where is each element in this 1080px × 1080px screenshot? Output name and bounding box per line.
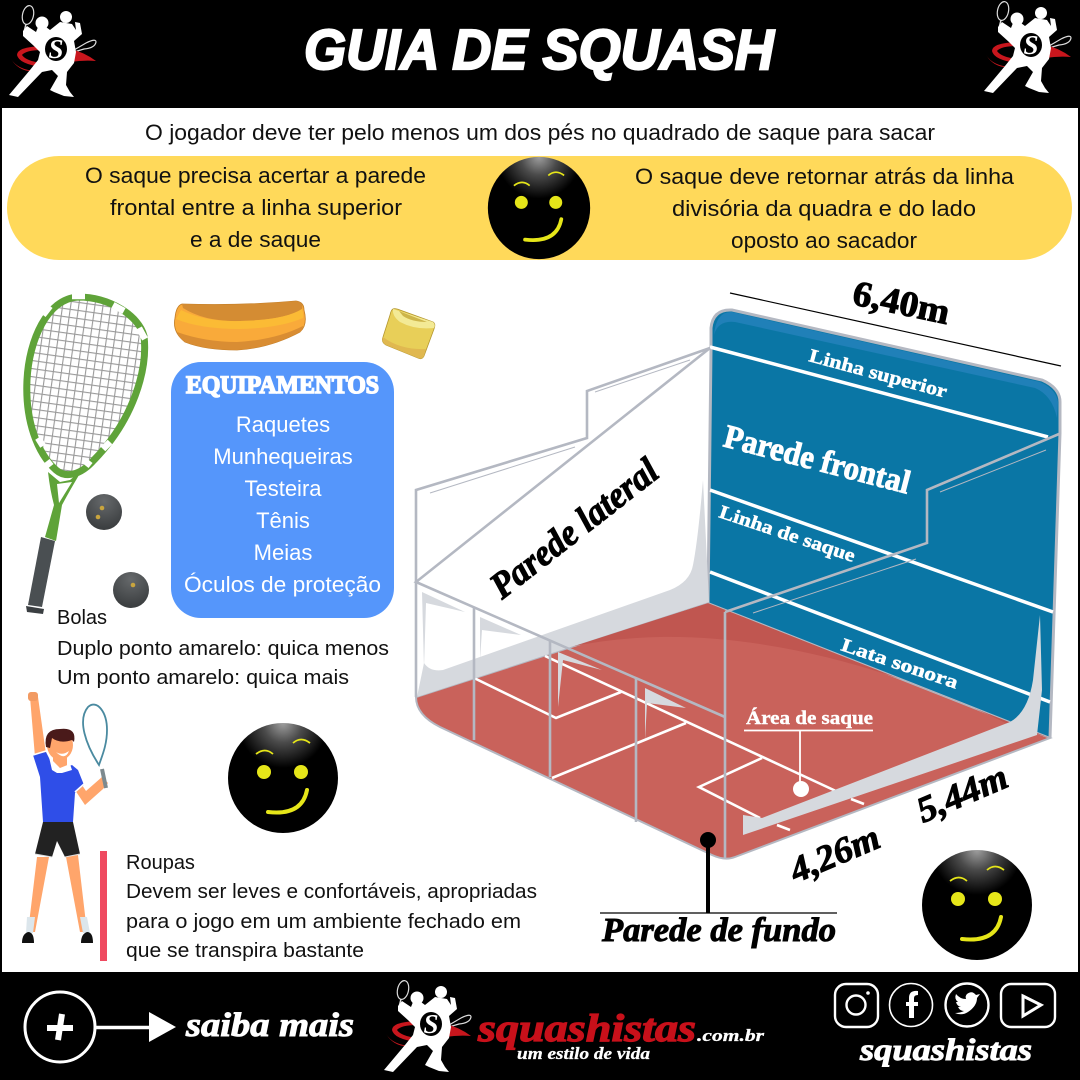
text: serve must hit front wall bbox=[85, 163, 426, 252]
court diagram bbox=[416, 273, 1061, 949]
panel: front wall bbox=[708, 310, 1060, 738]
label: parede lateral: Parede lateral bbox=[482, 450, 667, 608]
dimension: width 6,40m: 6,40m bbox=[849, 273, 954, 332]
icon: smiling squash ball, top bbox=[488, 157, 590, 259]
text: clothing bbox=[126, 852, 537, 962]
text: serve must return behind line: oposto ao sacador bbox=[731, 228, 917, 253]
text: social handle: squashistas bbox=[859, 1032, 1032, 1067]
icon: smiling squash ball, middle bbox=[228, 723, 338, 833]
text: clothing: que se transpira bastante bbox=[126, 940, 364, 962]
label: linha de saque: Linha de saque bbox=[716, 502, 858, 567]
text: serve must return behind line: divisória da quadra e do lado bbox=[672, 196, 976, 221]
equipment list: Meias bbox=[254, 540, 312, 565]
panel: equipment bbox=[171, 362, 394, 618]
icon: player figure bbox=[22, 692, 108, 943]
dimension: width 6,40m bbox=[730, 273, 1061, 366]
court wireframe bbox=[416, 348, 1059, 859]
text: serve must hit front wall: O saque precisa acertar a parede bbox=[85, 163, 426, 188]
label: parede frontal: Parede frontal bbox=[720, 419, 914, 502]
logo: footer: S bbox=[423, 1009, 439, 1039]
footer band bbox=[0, 972, 1080, 1080]
icon: facebook bbox=[890, 984, 932, 1026]
equipment list: Munhequeiras bbox=[213, 444, 353, 469]
logo: top right: S bbox=[1023, 30, 1039, 60]
text: clothing: para o jogo em um ambiente fechado em bbox=[126, 911, 521, 933]
panel: serve rules bbox=[7, 156, 1072, 260]
equipment list: Tênis bbox=[256, 508, 310, 533]
equipment list bbox=[184, 412, 381, 597]
label: parede de fundo: Parede de fundo bbox=[601, 912, 836, 949]
equipment list: Testeira bbox=[244, 476, 322, 501]
icon: single yellow dot ball bbox=[113, 572, 149, 608]
header band bbox=[0, 0, 1080, 108]
panel: floor bbox=[416, 603, 1050, 859]
court lines bbox=[474, 656, 864, 830]
equipment list: Raquetes bbox=[236, 412, 330, 437]
icon: wristband bbox=[382, 309, 435, 359]
label: area de saque bbox=[744, 707, 873, 797]
front wall lines bbox=[710, 347, 1053, 702]
heading: equipment: EQUIPAMENTOS bbox=[186, 372, 379, 399]
text: squashistas brand: squashistas bbox=[477, 1007, 696, 1050]
text: saiba mais: saiba mais bbox=[185, 1007, 354, 1044]
icon: smiling squash ball, bottom right bbox=[922, 850, 1032, 960]
text: balls: Bolas bbox=[57, 607, 107, 629]
text: balls: Duplo ponto amarelo: quica menos bbox=[57, 638, 389, 660]
dimension: 4,26m: 4,26m bbox=[783, 817, 886, 891]
text: serve must hit front wall: frontal entre a linha superior bbox=[110, 195, 402, 220]
label: linha superior: Linha superior bbox=[807, 346, 950, 403]
icon: twitter bbox=[946, 984, 988, 1026]
equipment list: Óculos de proteção bbox=[184, 572, 381, 597]
text: squashistas brand: um estilo de vida bbox=[517, 1044, 651, 1063]
label: lata sonora: Lata sonora bbox=[838, 635, 961, 694]
accent bar bbox=[100, 851, 107, 961]
icon: plus circle with arrow bbox=[25, 992, 176, 1062]
text: serve must return behind line bbox=[635, 164, 1015, 253]
icon: headband bbox=[174, 301, 305, 350]
logo: top right bbox=[984, 1, 1071, 93]
logo: top left bbox=[9, 5, 96, 97]
subtitle: serve foot rule: O jogador deve ter pelo menos um dos pés no quadrado de saque para sacar bbox=[145, 120, 935, 145]
dimension: 5,44m: 5,44m bbox=[910, 756, 1014, 830]
text: clothing: Devem ser leves e confortáveis, apropriadas bbox=[126, 881, 537, 903]
text: balls: Um ponto amarelo: quica mais bbox=[57, 667, 349, 689]
text: squashistas brand: .com.br bbox=[697, 1026, 764, 1045]
icon: youtube bbox=[1001, 984, 1055, 1027]
text: serve must return behind line: O saque deve retornar atrás da linha bbox=[635, 164, 1015, 189]
icon: instagram bbox=[835, 984, 878, 1027]
label: area de saque: Área de saque bbox=[746, 707, 873, 729]
logo: footer bbox=[384, 980, 471, 1072]
text: balls bbox=[57, 607, 389, 689]
panel: side wall shading bbox=[417, 480, 1042, 835]
title: GUIA DE SQUASH bbox=[304, 18, 776, 82]
text: serve must hit front wall: e a de saque bbox=[190, 227, 321, 252]
text: clothing: Roupas bbox=[126, 852, 195, 874]
text: squashistas brand bbox=[477, 1007, 764, 1063]
logo: top left: S bbox=[48, 34, 64, 64]
label: parede de fundo bbox=[600, 832, 837, 949]
icon: double yellow dot ball bbox=[86, 494, 122, 530]
icon: green racket bbox=[26, 296, 145, 614]
